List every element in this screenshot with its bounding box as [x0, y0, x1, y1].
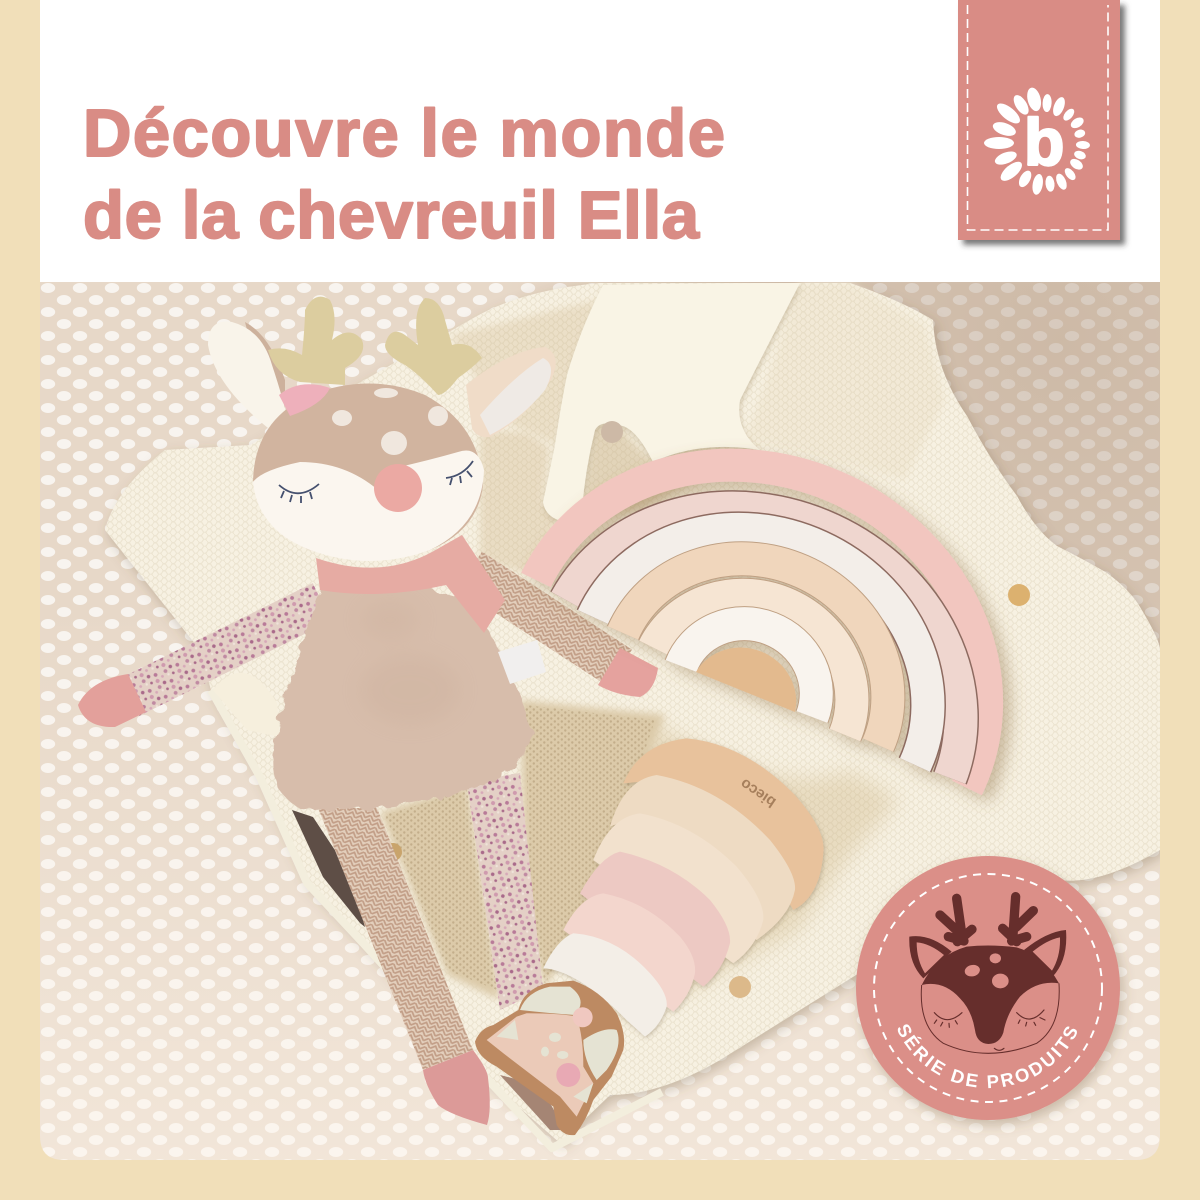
doll spots — [332, 388, 448, 455]
title — [83, 96, 725, 253]
blanket shade under fold — [585, 425, 760, 520]
toy spots — [541, 1033, 568, 1059]
rainbow band: white — [593, 529, 928, 765]
deer forehead and snout — [922, 945, 1059, 1044]
doll left ear — [208, 321, 288, 428]
blanket hanging flap — [543, 283, 800, 521]
rainbow band: cream — [654, 595, 852, 735]
doll nose — [374, 464, 422, 512]
blanket flap at hip — [213, 673, 280, 737]
doll head — [253, 384, 483, 560]
doll right ear — [466, 347, 556, 437]
toy nose — [573, 1007, 593, 1027]
doll tag — [498, 640, 546, 684]
deer antlers — [940, 897, 1033, 942]
doll fur shading — [360, 600, 460, 725]
rainbow band: tan — [623, 559, 888, 745]
cone ring: white — [543, 933, 667, 1037]
doll muzzle — [253, 450, 484, 561]
doll foot — [423, 1050, 490, 1125]
deer head outline — [921, 983, 1059, 1053]
toy flower — [556, 1063, 580, 1087]
blanket upper knit — [450, 300, 597, 445]
wooden stacking cone — [543, 738, 824, 1037]
deer ears — [909, 930, 1066, 978]
blanket right fold — [745, 283, 945, 480]
toy cheeks and ears — [497, 987, 619, 1103]
seam — [593, 529, 928, 765]
seam — [623, 559, 888, 745]
doll right leg — [467, 773, 543, 1010]
wooden deer toy — [475, 981, 624, 1135]
cone ring: beige — [610, 775, 795, 940]
doll arm left — [130, 602, 322, 697]
brand mark on cone: bieco — [737, 775, 779, 811]
doll left leg — [318, 808, 473, 1070]
blanket knots — [1008, 584, 1030, 606]
basket — [211, 690, 662, 1148]
plush deer doll — [78, 297, 658, 1125]
doll flower — [279, 384, 330, 416]
woven background — [40, 282, 1160, 1160]
doll eyes — [279, 461, 473, 503]
rainbow band: light pink — [566, 508, 961, 778]
product series badge — [852, 854, 1130, 1132]
doll hand right — [598, 648, 658, 697]
cone ring: light beige — [593, 813, 763, 963]
cone ring: light pink — [563, 893, 695, 1012]
blanket shading below rainbow — [600, 720, 900, 1020]
seam — [654, 595, 852, 735]
rainbow band: inner white — [681, 624, 816, 717]
deer spots — [964, 964, 981, 978]
ribbon badge with brand logo — [958, 0, 1120, 240]
icon: deer face — [909, 897, 1066, 1053]
deer eyes — [934, 1010, 1045, 1050]
doll right antler — [385, 298, 482, 395]
icon: brand flower — [984, 86, 1090, 196]
doll scarf — [316, 535, 505, 633]
doll hand left — [78, 674, 146, 727]
header panel — [40, 0, 1160, 282]
blanket lobe beside head — [480, 430, 558, 575]
doll left antler — [268, 297, 363, 385]
logo letter: b — [1024, 105, 1064, 179]
doll fur body — [273, 584, 532, 810]
doll arm right — [470, 570, 620, 668]
wooden rainbow — [536, 465, 987, 788]
rainbow centre: wood — [696, 648, 796, 712]
cream knit blanket — [105, 283, 1160, 1143]
title: Découvre le monde — [83, 96, 725, 171]
cone ring: pink — [580, 852, 730, 987]
badge label: SÉRIE DE PRODUITS — [898, 1024, 1077, 1088]
cone ring: wood — [623, 738, 824, 910]
rainbow band: outer pink — [536, 465, 987, 788]
toy face — [487, 1013, 593, 1117]
title: de la chevreuil Ella — [83, 178, 700, 253]
seam — [566, 508, 961, 778]
seam — [681, 624, 816, 717]
photo panel — [40, 282, 1160, 1160]
inner blanket shade — [380, 700, 665, 1000]
